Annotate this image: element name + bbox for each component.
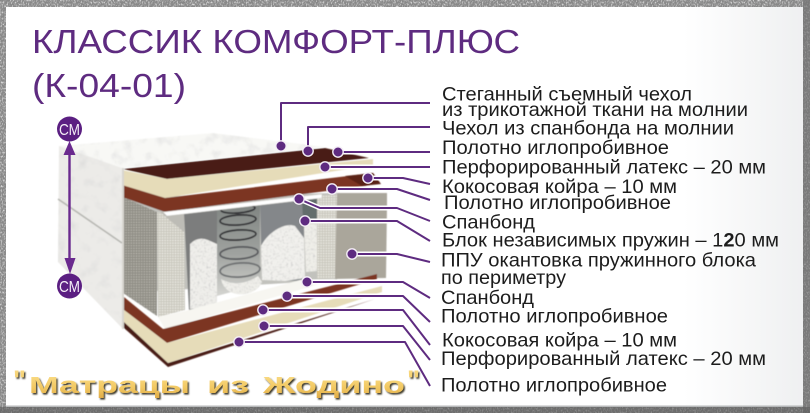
lower latex layer [124, 286, 382, 363]
brand caption: Жодино [261, 372, 405, 398]
layer labels: Стеганный съемный чехол [442, 84, 692, 106]
layer labels: Полотно иглопробивное [441, 374, 667, 396]
upper spanbond sheet [163, 194, 322, 216]
brand caption [13, 365, 420, 398]
layer labels: Блок независимых пружин – 1 20 мм [442, 230, 779, 252]
top coir layer [122, 173, 380, 212]
layer labels: Чехол из спанбонда на молнии [442, 118, 734, 140]
left pocket [184, 209, 217, 310]
layer labels: Полотно иглопробивное [441, 306, 668, 328]
leader dots [234, 141, 373, 347]
front edge of cover [122, 168, 124, 329]
left perforated wall [123, 197, 157, 316]
brand caption: из [207, 372, 249, 398]
layer labels [441, 84, 779, 396]
lower coir layer [124, 274, 377, 343]
lower spanbond sheet [158, 279, 337, 329]
right small pocket [304, 224, 317, 272]
mattress cutaway [58, 133, 387, 367]
rear cavity [123, 193, 337, 293]
right perforated panel [317, 194, 337, 279]
layer labels: Полотно иглопробивное [444, 192, 671, 214]
height arrow: СМ [59, 279, 80, 296]
layer labels: Кокосовая койра – 10 мм [442, 330, 677, 352]
leader lines [239, 103, 430, 386]
top needle-punched layer [123, 148, 369, 179]
top latex layer [122, 159, 373, 198]
right foam block [335, 193, 387, 279]
layer labels: Полотно иглопробивное [442, 137, 669, 159]
title: КЛАССИК КОМФОРТ-ПЛЮС [32, 23, 520, 60]
title: (К-04-01) [32, 67, 186, 104]
layer labels: по периметру [441, 267, 566, 289]
right pocket [260, 198, 305, 281]
layer labels: Перфорированный латекс – 20 мм [442, 156, 766, 178]
spring pocket [221, 276, 262, 294]
layer labels: Перфорированный латекс – 20 мм [441, 348, 766, 370]
layer labels: Спанбонд [442, 212, 536, 234]
brand caption: " [13, 365, 26, 395]
height arrow [57, 116, 82, 298]
layer labels: из трикотажной ткани на молнии [442, 99, 748, 121]
quilted cover side [58, 146, 123, 329]
centre pocket back [217, 203, 260, 296]
lower needle-punched layer [124, 299, 375, 367]
spring coil [220, 204, 260, 278]
layer labels: Спанбонд [441, 287, 535, 309]
title [32, 23, 520, 104]
brand caption: Матрацы [29, 372, 190, 398]
layer labels: Кокосовая койра – 10 мм [442, 176, 677, 198]
quilted cover top [59, 133, 325, 168]
left perforated inner panel [157, 212, 185, 317]
height arrow: СМ [59, 122, 80, 139]
layer labels: ППУ окантовка пружинного блока [441, 250, 756, 272]
brand caption: " [407, 365, 420, 395]
